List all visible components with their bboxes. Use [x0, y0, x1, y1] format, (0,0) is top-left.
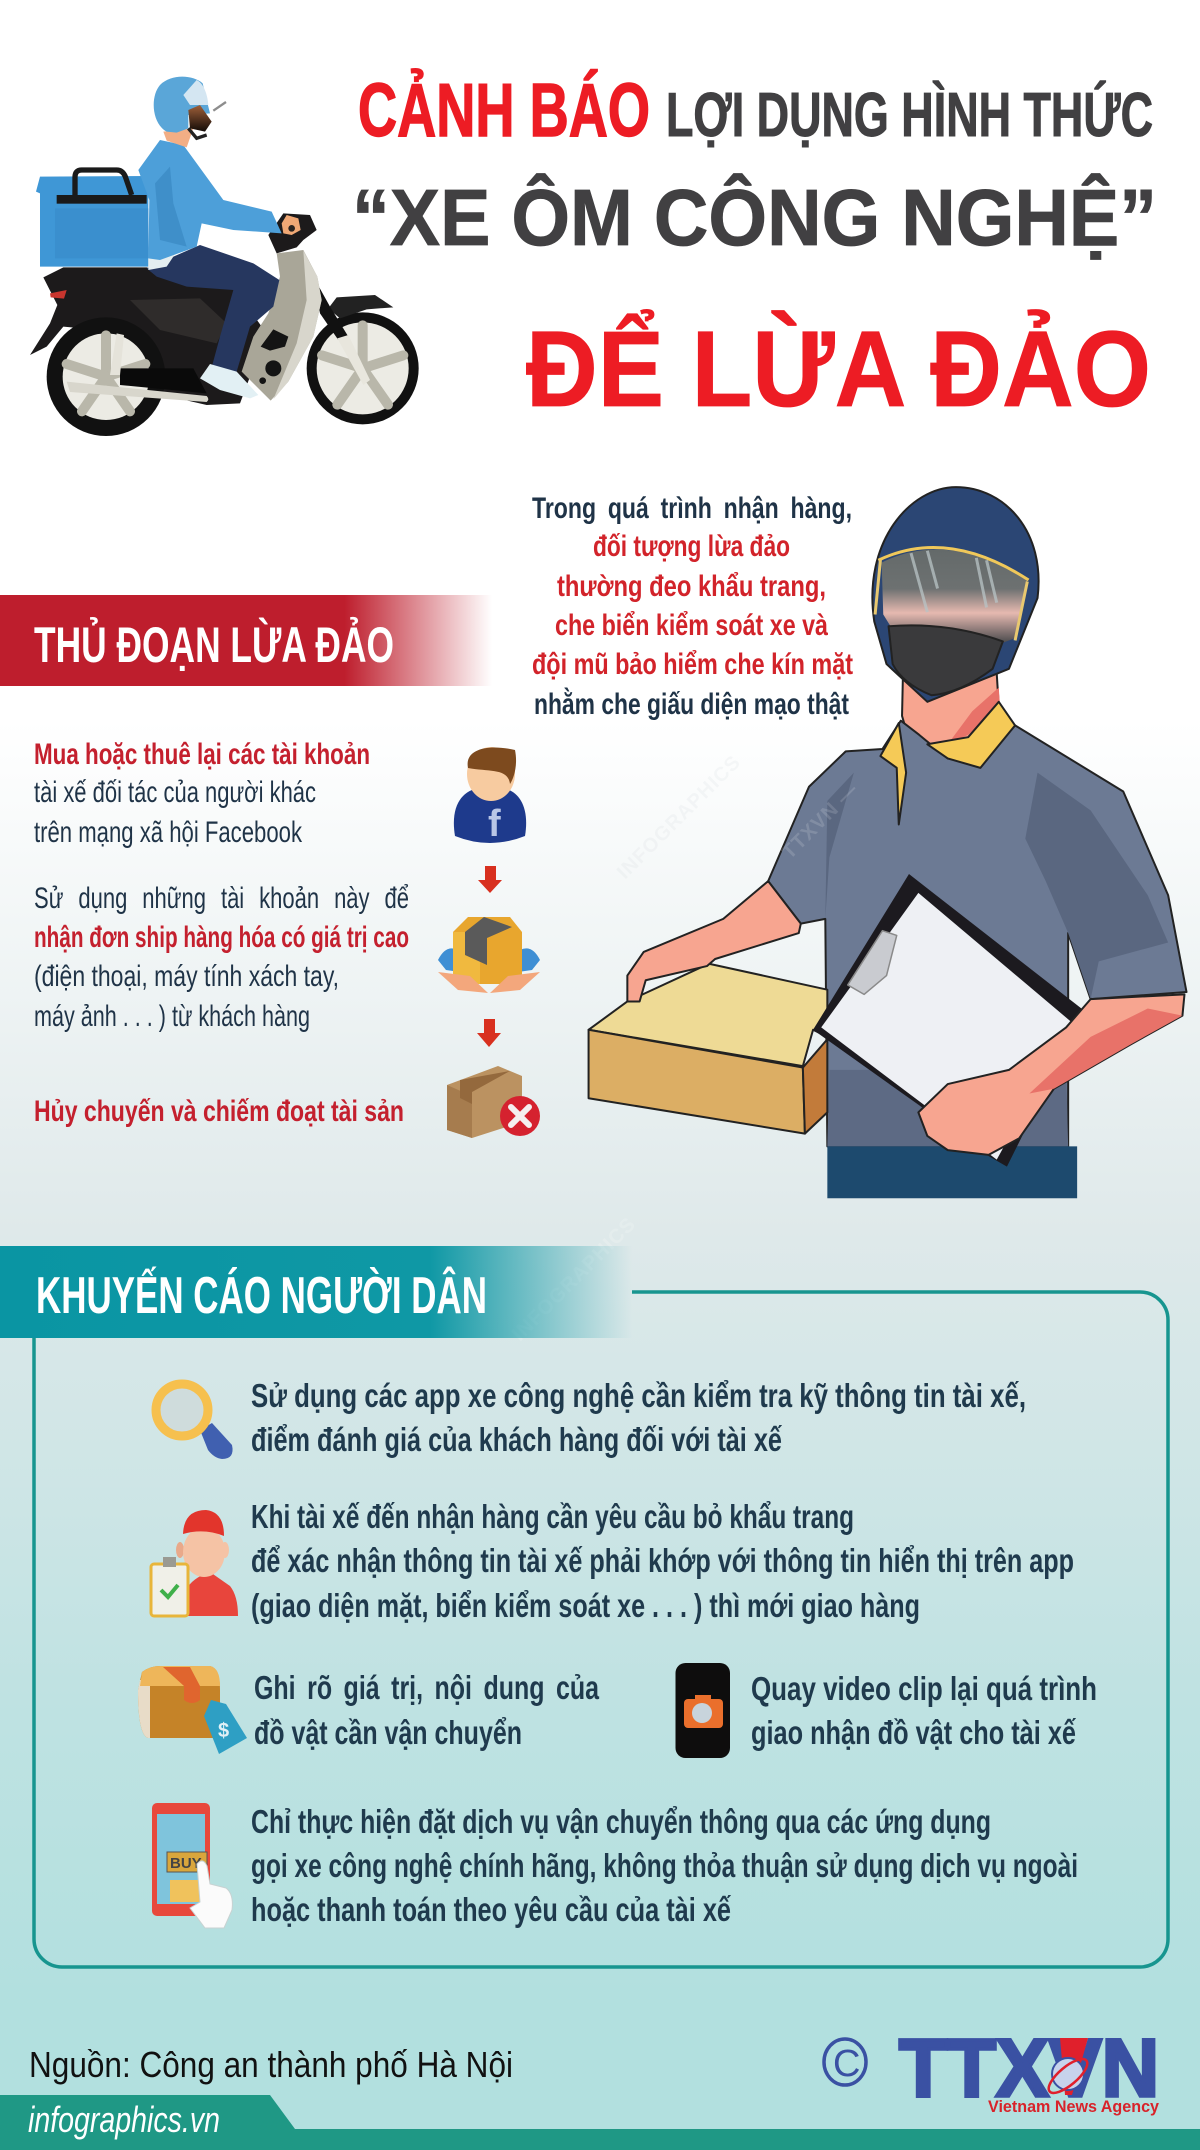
recommendation 1: điểm đánh giá của khách hàng đối với tài xế: [251, 1421, 782, 1458]
step 2 text: Sử dụng những tài khoản này để: [34, 882, 409, 915]
title: “XE ÔM CÔNG NGHỆ”: [352, 173, 1157, 262]
title: [352, 68, 1157, 429]
recommendation 4: [676, 1663, 1097, 1758]
recommendation 2: Khi tài xế đến nhận hàng cần yêu cầu bỏ khẩu trang: [251, 1498, 854, 1535]
recommendation 5: [152, 1803, 1078, 1928]
recommendation 3: Ghi rõ giá trị, nội dung của: [254, 1669, 599, 1706]
recommendation 2: (giao diện mặt, biển kiểm soát xe . . . ) thì mới giao hàng: [251, 1587, 920, 1624]
step 1 text: tài xế đối tác của người khác: [34, 776, 316, 809]
step 2 text: nhận đơn ship hàng hóa có giá trị cao: [34, 921, 409, 954]
step 1 text: [34, 738, 370, 849]
step 1 text: trên mạng xã hội Facebook: [34, 816, 303, 849]
heading banner: scam tactics: [0, 595, 492, 686]
recommendation 3: [138, 1666, 599, 1754]
heading banner: scam tactics: THỦ ĐOẠN LỪA ĐẢO: [34, 616, 394, 673]
text block: scam description: che biển kiểm soát xe và: [555, 609, 828, 642]
text block: scam description: đối tượng lừa đảo: [593, 530, 790, 563]
arrow: step 1 to step 2: [478, 866, 502, 893]
icon: parcel with price tag: [138, 1666, 247, 1754]
illustration: masked delivery man holding box and clipboard: [589, 487, 1187, 1198]
text block: scam description: thường đeo khẩu trang,: [557, 570, 826, 603]
recommendation 1: [156, 1377, 1026, 1459]
icon: cancelled parcel: [447, 1066, 540, 1138]
copyright symbol: [824, 2039, 866, 2085]
title: ĐỂ LỪA ĐẢO: [526, 308, 1151, 429]
recommendation 4: Quay video clip lại quá trình: [751, 1670, 1097, 1707]
icon: driver with checklist: [151, 1510, 238, 1616]
arrow: step 2 to step 3: [477, 1019, 501, 1047]
logo: TTXVN Vietnam News Agency: TTXVN: [899, 2023, 1159, 2114]
recommendations panel outline: [34, 1292, 1168, 1967]
step 1 text: Mua hoặc thuê lại các tài khoản: [34, 738, 370, 771]
icon: package held by hands: [438, 917, 540, 993]
recommendation 2: [151, 1498, 1074, 1624]
recommendation 5: hoặc thanh toán theo yêu cầu của tài xế: [251, 1891, 731, 1928]
copyright symbol: C: [833, 2043, 860, 2085]
step 3 text: Hủy chuyến và chiếm đoạt tài sản: [34, 1095, 404, 1128]
icon: magnifier: [156, 1384, 233, 1459]
heading banner: recommendations: [0, 1246, 632, 1338]
logo: TTXVN Vietnam News Agency: Vietnam News Agency: [988, 2097, 1160, 2116]
title: CẢNH BÁO: [358, 68, 650, 152]
step 2 text: máy ảnh . . . ) từ khách hàng: [34, 1000, 310, 1033]
recommendation 4: giao nhận đồ vật cho tài xế: [751, 1714, 1076, 1751]
recommendation 3: đồ vật cần vận chuyển: [254, 1714, 522, 1751]
infographic page: INFOGRAPHICS: [613, 751, 745, 884]
source line: Nguồn: Công an thành phố Hà Nội: [29, 2044, 513, 2085]
icon: phone with buy button: BUY: [170, 1855, 202, 1872]
icon: phone with buy button: [152, 1803, 232, 1928]
text block: scam description: nhằm che giấu diện mạo thật: [534, 687, 849, 721]
icon: facebook user: f: [488, 803, 501, 845]
text block: scam description: [532, 492, 853, 721]
step 2 text: [34, 882, 409, 1033]
footer bar with website tab: infographics.vn: [28, 2099, 220, 2140]
icon: facebook user: [454, 747, 526, 845]
heading banner: recommendations: KHUYẾN CÁO NGƯỜI DÂN: [36, 1266, 487, 1325]
footer bar with website tab: [0, 2095, 1200, 2150]
infographic page: INFOGRAPHICS: [508, 1213, 640, 1346]
icon: parcel with price tag: $: [218, 1720, 229, 1742]
icon: phone camera: [676, 1663, 730, 1758]
step 2 text: (điện thoại, máy tính xách tay,: [34, 960, 339, 993]
text block: scam description: đội mũ bảo hiểm che kín mặt: [532, 648, 853, 681]
infographic page: TTXVN —: [778, 779, 863, 864]
illustration: delivery rider on motorbike: [30, 77, 419, 436]
text block: scam description: Trong quá trình nhận hàng,: [532, 492, 852, 525]
